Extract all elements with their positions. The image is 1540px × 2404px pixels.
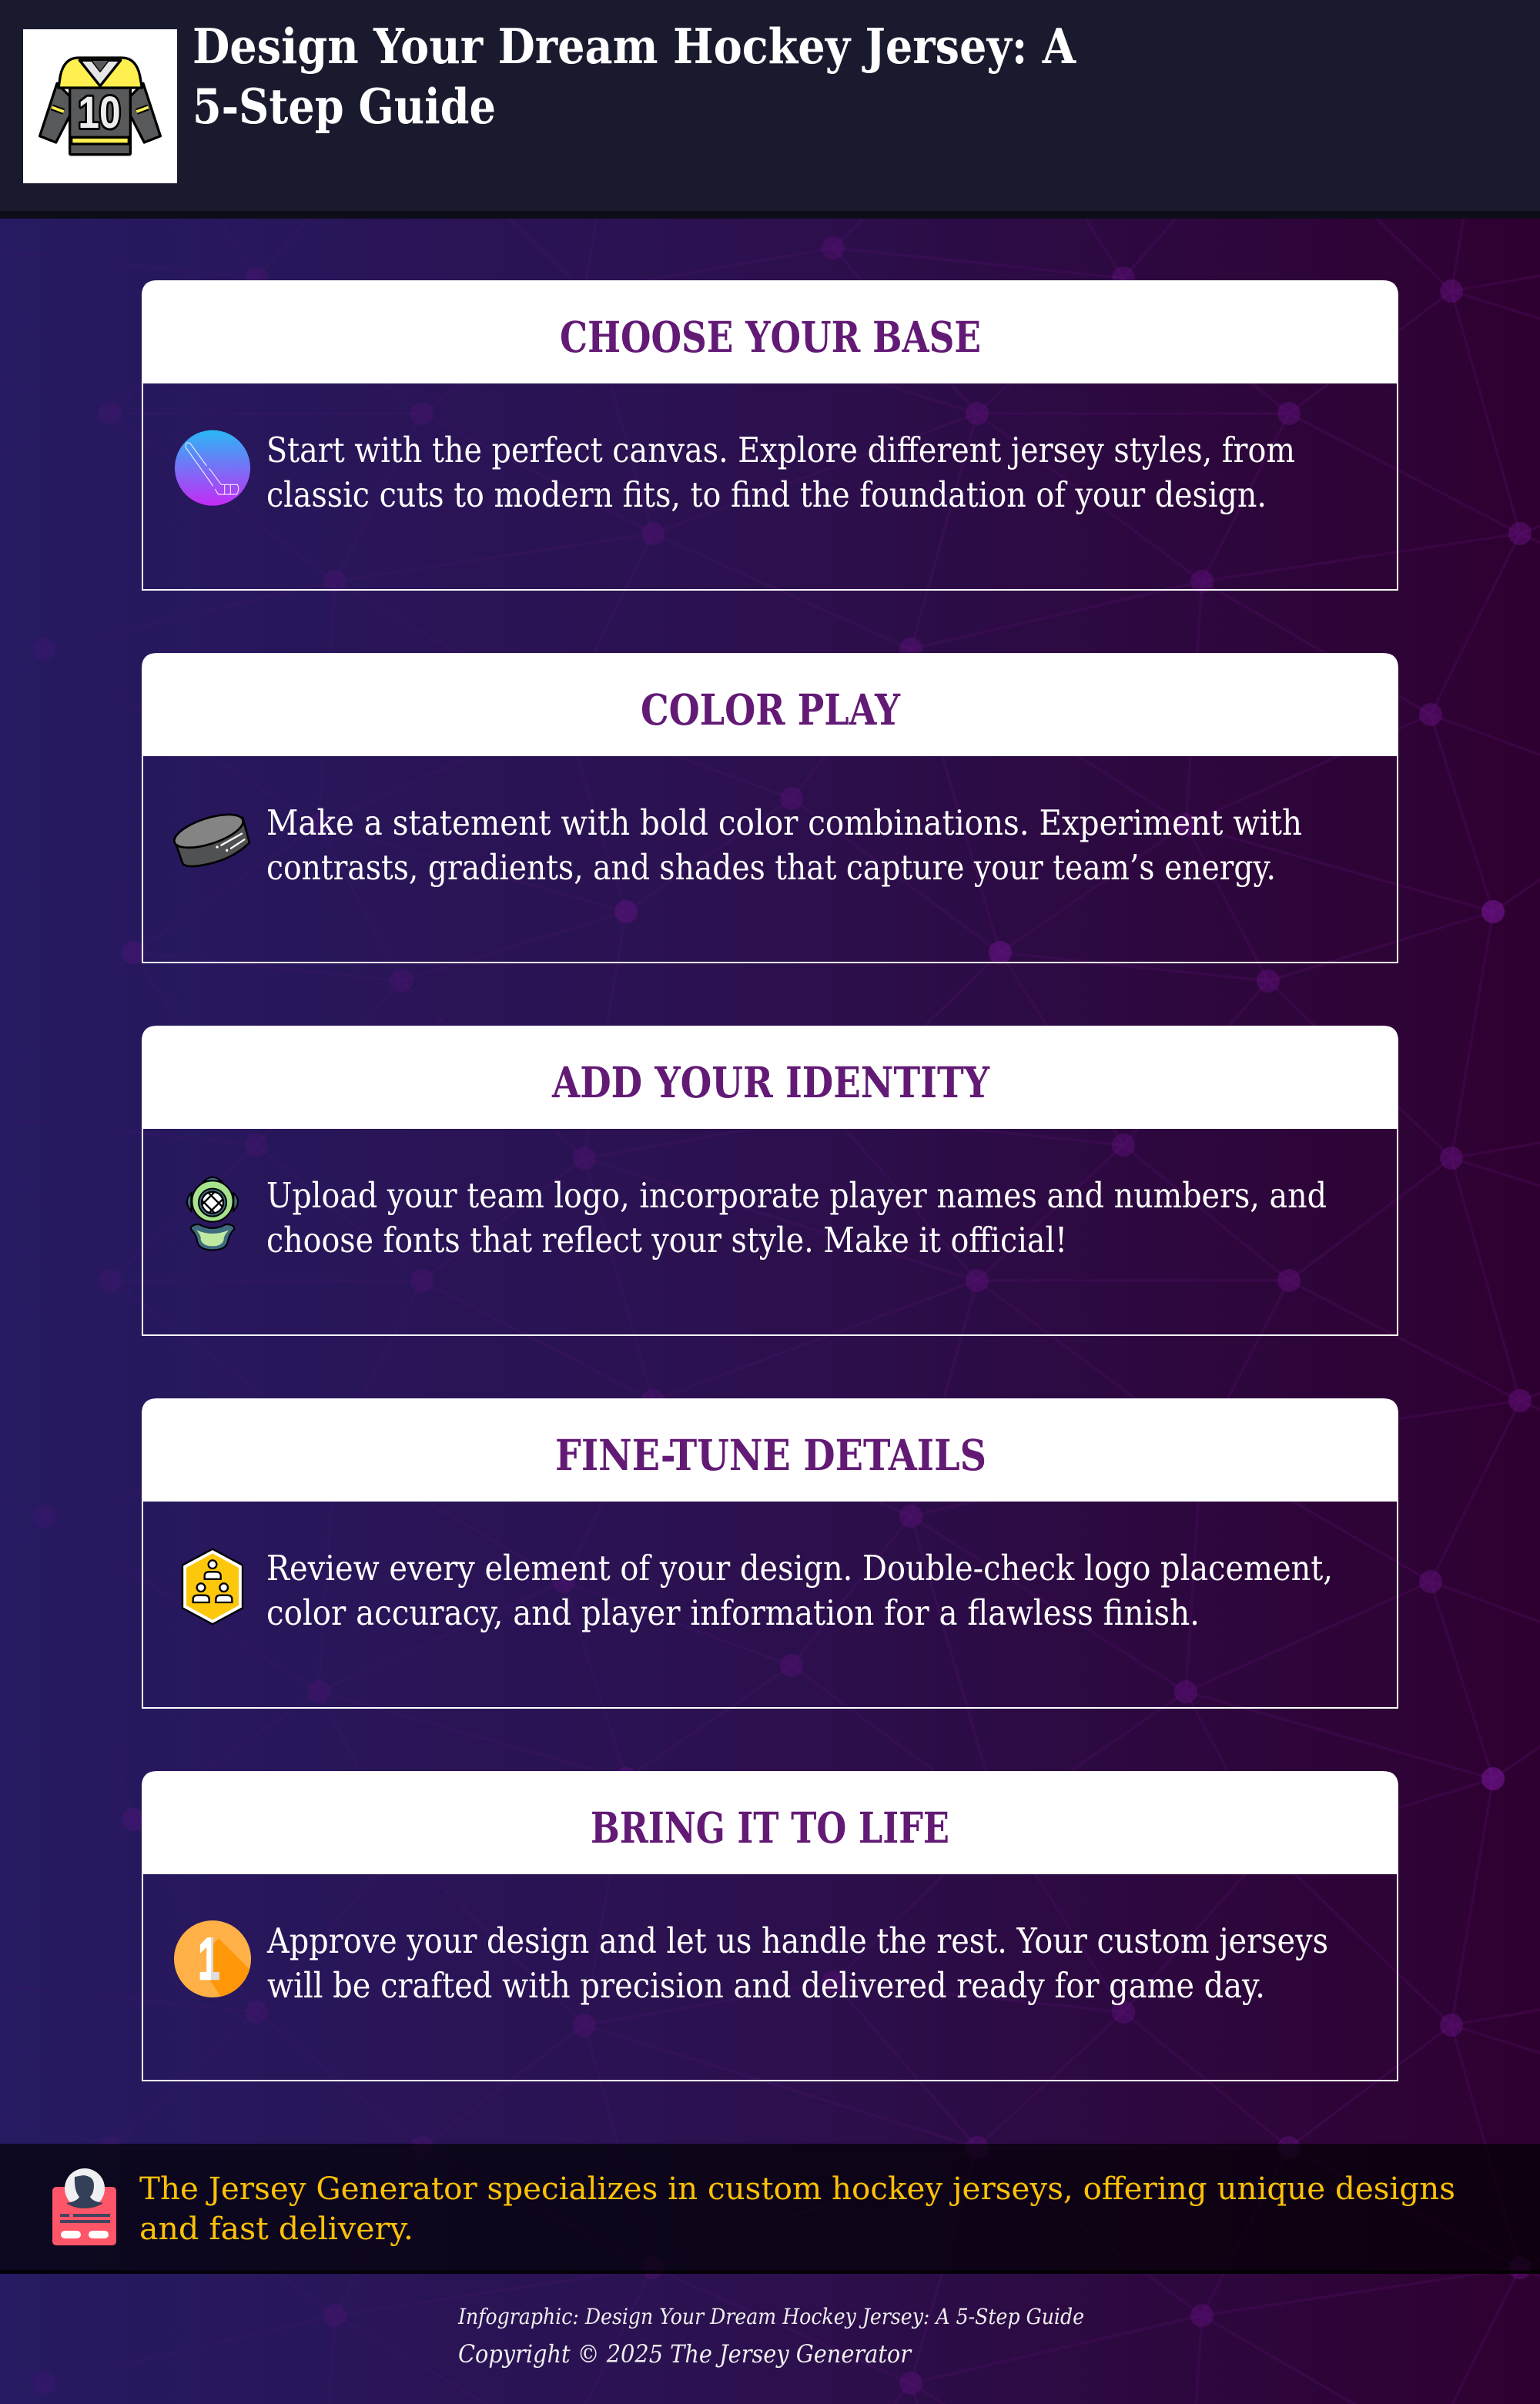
- icon: id card: [52, 2168, 116, 2245]
- panel: bring it to life: [142, 1771, 1398, 2081]
- title: Design Your Dream Hockey Jersey: A: [192, 18, 1076, 75]
- body text: contrasts, gradients, and shades that capture your team’s energy.: [266, 847, 1276, 888]
- body text: [266, 1548, 1333, 1633]
- icon: number one coin: [174, 1920, 251, 1997]
- body text: choose fonts that reflect your style. Make it official!: [266, 1220, 1067, 1261]
- company description: and fast delivery.: [139, 2211, 413, 2247]
- heading: choose your base: CHOOSE YOUR BASE: [560, 312, 981, 362]
- logo: hockey jersey: 10: [78, 88, 121, 138]
- heading: color play: COLOR PLAY: [641, 685, 901, 735]
- logo: hockey jersey: [23, 29, 177, 183]
- body text: Approve your design and let us handle the rest. Your custom jerseys: [266, 1920, 1328, 1961]
- icon: team badge: [182, 1549, 243, 1624]
- header banner: [0, 0, 1540, 219]
- icon: diving helmet: [187, 1177, 238, 1250]
- icon: number one coin: 1: [198, 1927, 219, 1992]
- body text: classic cuts to modern fits, to find the foundation of your design.: [266, 474, 1267, 515]
- body text: will be crafted with precision and delivered ready for game day.: [267, 1965, 1265, 2006]
- heading: fine-tune details: FINE-TUNE DETAILS: [555, 1430, 986, 1480]
- panel: fine-tune details: [142, 1398, 1398, 1708]
- heading: add your identity: ADD YOUR IDENTITY: [551, 1057, 990, 1107]
- body text: Make a statement with bold color combinations. Experiment with: [266, 802, 1302, 843]
- heading: bring it to life: BRING IT TO LIFE: [591, 1803, 949, 1853]
- body text: [266, 1175, 1327, 1261]
- company band: [0, 2144, 1540, 2274]
- panel: color play: [142, 653, 1398, 963]
- body text: Start with the perfect canvas. Explore different jersey styles, from: [266, 430, 1295, 470]
- panel: choose your base: [142, 280, 1398, 590]
- body text: [266, 802, 1302, 888]
- body text: color accuracy, and player information for a flawless finish.: [266, 1592, 1200, 1633]
- body text: [266, 1920, 1328, 2006]
- panel: add your identity: [142, 1026, 1398, 1335]
- company description: [139, 2171, 1455, 2247]
- title: [192, 18, 1076, 135]
- body text: Upload your team logo, incorporate player names and numbers, and: [266, 1175, 1327, 1216]
- icon: hockey stick: [175, 430, 250, 506]
- company description: The Jersey Generator specializes in custom hockey jerseys, offering unique designs: [139, 2171, 1455, 2207]
- footer credits: Copyright © 2025 The Jersey Generator: [458, 2339, 912, 2369]
- footer credits: [457, 2304, 1084, 2369]
- icon: hockey puck: [170, 808, 249, 866]
- footer credits: Infographic: Design Your Dream Hockey Jersey: A 5-Step Guide: [457, 2304, 1084, 2329]
- title: 5-Step Guide: [192, 78, 496, 135]
- body text: [266, 430, 1295, 515]
- body text: Review every element of your design. Double-check logo placement,: [266, 1548, 1333, 1589]
